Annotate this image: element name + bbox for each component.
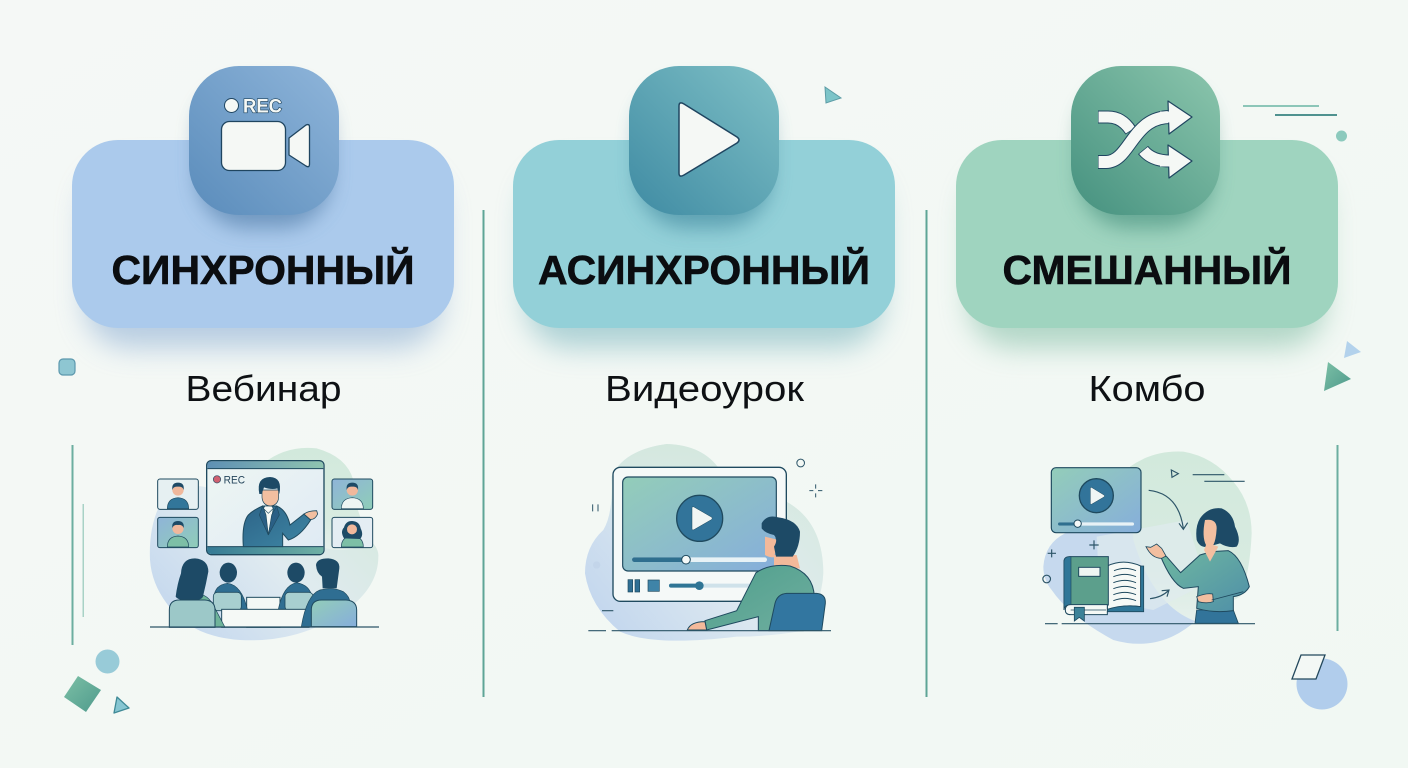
panel: asynchronous [513, 66, 895, 348]
icon: video camera with REC [189, 66, 339, 228]
decorative shapes: right [1324, 341, 1361, 391]
illustration: video lesson [585, 444, 831, 641]
viewer from behind [687, 516, 825, 631]
subheading: video lesson: Видеоурок [605, 368, 804, 409]
teacher [1146, 508, 1249, 623]
subheading: webinar: Вебинар [186, 368, 342, 409]
heading: synchronous: СИНХРОННЫЙ [112, 247, 414, 293]
open book [1064, 557, 1144, 621]
audience [169, 558, 357, 627]
decorative shapes: top right [1243, 106, 1347, 142]
subheading: combo: Комбо [1088, 368, 1206, 409]
vertical divider 2 [926, 210, 928, 697]
heading: blended: СМЕШАННЫЙ [1002, 247, 1292, 293]
illustration: webinar [150, 448, 379, 640]
arrows and accents [1043, 470, 1255, 624]
vertical divider 1 [482, 210, 484, 697]
icon: shuffle arrows [1071, 66, 1220, 228]
decorative line right [1336, 445, 1338, 631]
monitor and player [613, 467, 786, 601]
icon: video camera with REC: REC [243, 96, 282, 118]
icon: play button [629, 66, 779, 228]
decorative line left [72, 445, 74, 645]
video card [1051, 468, 1141, 533]
participant tiles [158, 479, 373, 548]
panel: synchronous [72, 66, 454, 348]
panel: blended [956, 66, 1338, 348]
main screen with presenter [207, 461, 324, 555]
decorative shapes: bottom right [1292, 655, 1348, 710]
main screen with presenter: REC [224, 474, 245, 486]
small accents [593, 459, 822, 511]
illustration: combo [1043, 452, 1255, 644]
heading: asynchronous: АСИНХРОННЫЙ [538, 247, 870, 293]
decorative shapes: top centre [825, 87, 841, 103]
decorative shapes: left [59, 359, 129, 713]
